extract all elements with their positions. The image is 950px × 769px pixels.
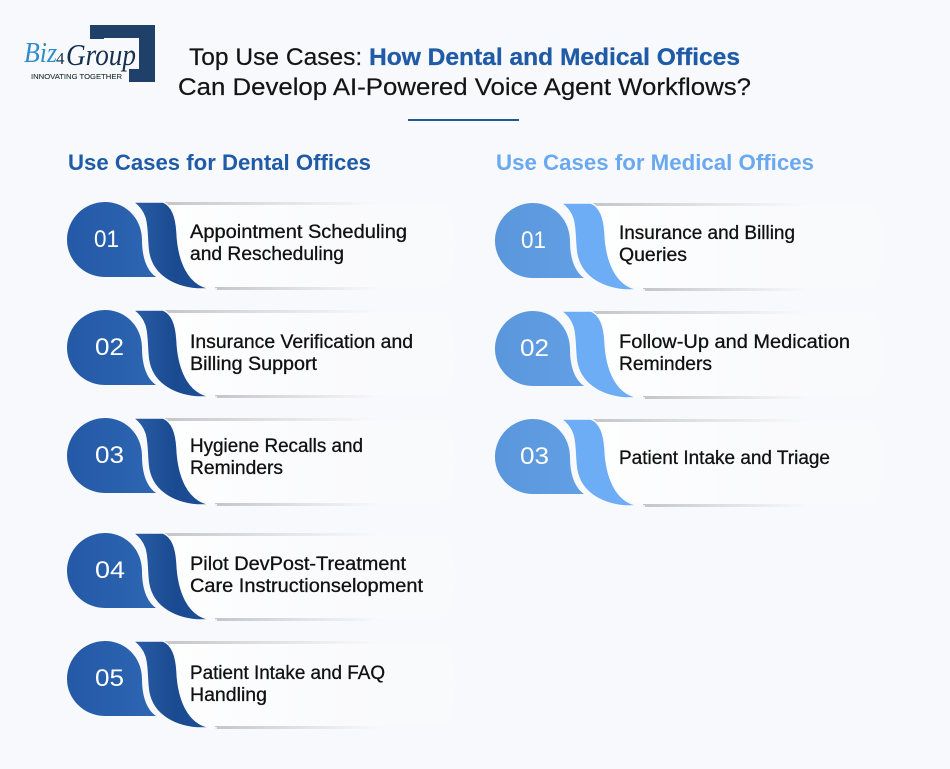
heading: dental: Use Cases for Dental Offices [68,150,371,175]
panel: medical 02: Reminders [619,354,712,375]
panel: medical 02: Follow-Up and Medication [619,332,850,353]
logo: Group [66,37,136,72]
logo: Biz [24,38,57,69]
panel: dental 05: Patient Intake and FAQ [190,663,385,684]
panel: dental 01: 01 [94,226,119,253]
panel: medical 01: Insurance and Billing [619,223,795,244]
logo [24,25,155,82]
title [178,44,751,101]
panel: medical 01: Queries [619,245,687,266]
panel: medical 01 [495,203,883,291]
heading: medical: Use Cases for Medical Offices [496,150,814,175]
panel: dental 02: Billing Support [190,354,318,375]
panel: dental 01: and Rescheduling [190,244,344,265]
panel: dental 02: Insurance Verification and [190,332,413,353]
title divider [408,119,519,121]
panel: medical 03: 03 [520,443,549,470]
title: Can Develop AI-Powered Voice Agent Workflows? [178,74,751,101]
logo: INNOVATING TOGETHER [31,72,123,81]
panel: dental 04: Care Instructionselopment [190,576,424,597]
panel: dental 05 [67,641,455,729]
panel: dental 04: Pilot DevPost-Treatment [190,554,407,575]
panel: dental 03 [67,418,455,506]
panel: dental 01: Appointment Scheduling [190,222,407,243]
panel: medical 02: 02 [520,335,549,362]
panel: dental 04: 04 [95,557,125,584]
panel: medical 02 [495,311,883,399]
panel: medical 03: Patient Intake and Triage [619,448,830,469]
panel: dental 03: Reminders [190,458,283,479]
panel: medical 01: 01 [521,227,546,254]
panel: dental 03: Hygiene Recalls and [190,436,363,457]
panel: dental 03: 03 [95,442,124,469]
panel: medical 03 [495,419,883,507]
title: Top Use Cases: How Dental and Medical Offices [189,44,740,71]
panel: dental 05: Handling [190,685,267,706]
panel: dental 02: 02 [95,334,124,361]
panel: dental 01 [67,202,455,290]
panel: dental 05: 05 [95,665,124,692]
panel: dental 04 [67,533,455,621]
logo: 4 [56,49,65,68]
panel: dental 02 [67,310,455,398]
